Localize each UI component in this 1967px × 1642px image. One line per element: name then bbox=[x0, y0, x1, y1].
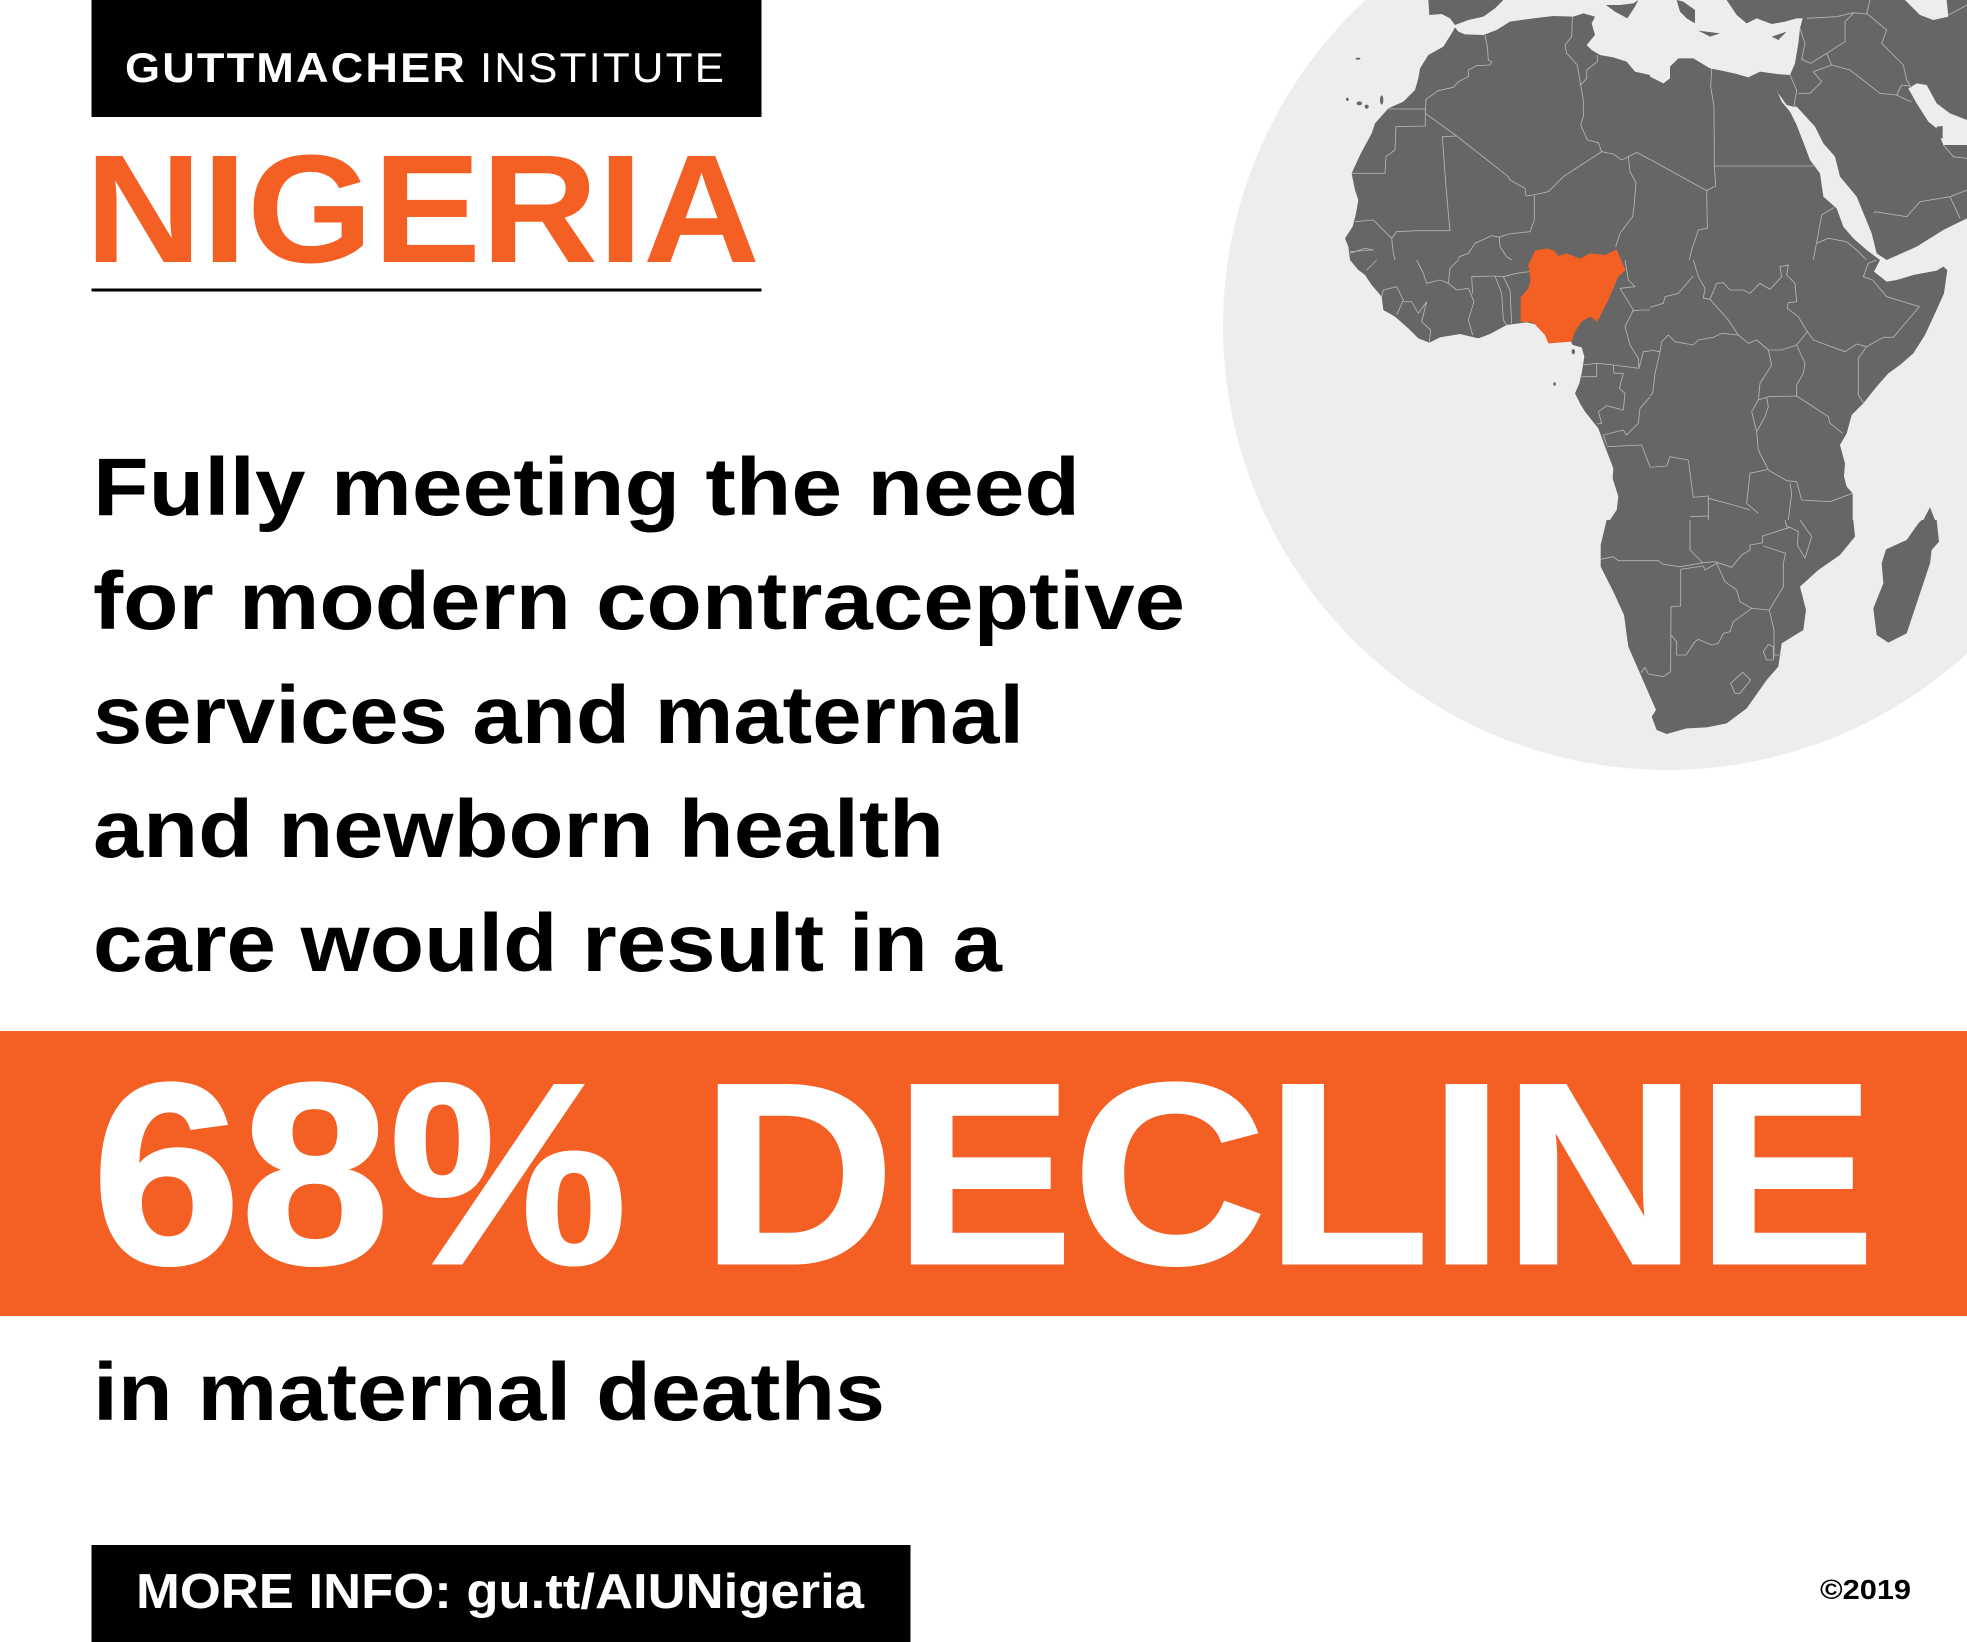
body text: Fully meeting the need bbox=[93, 442, 1080, 533]
body text: and newborn health bbox=[93, 784, 944, 875]
body text: care would result in a bbox=[93, 898, 1004, 989]
title underline bbox=[92, 288, 762, 292]
west Africa and Gulf of Guinea bbox=[1340, 260, 1660, 520]
Nigeria highlighted bbox=[1521, 248, 1626, 343]
southern Africa and Madagascar bbox=[1601, 520, 1939, 734]
headline statistic: 68% DECLINE bbox=[92, 1029, 1875, 1318]
body text: services and maternal bbox=[93, 670, 1024, 761]
body text bbox=[93, 442, 1185, 989]
globe map bbox=[1223, 0, 1967, 770]
closing text: in maternal deaths bbox=[93, 1347, 885, 1438]
title: Nigeria: NIGERIA bbox=[85, 123, 760, 295]
more info bar bbox=[92, 1545, 910, 1642]
logo text: GUTTMACHER bbox=[125, 44, 467, 91]
northeast Africa and Middle East bbox=[1650, 0, 1967, 260]
copyright: ©2019 bbox=[1820, 1574, 1911, 1605]
east Africa bbox=[1650, 260, 1967, 520]
header bar: Guttmacher Institute logo bbox=[92, 0, 762, 117]
globe circle bbox=[1223, 0, 1967, 770]
header bar: Guttmacher Institute logo: INSTITUTE bbox=[480, 44, 726, 91]
orange banner bbox=[0, 1029, 1967, 1318]
body text: for modern contraceptive bbox=[93, 556, 1185, 647]
more info link: MORE INFO: gu.tt/AIUNigeria bbox=[136, 1565, 865, 1619]
northwest Africa bbox=[1345, 0, 1660, 260]
